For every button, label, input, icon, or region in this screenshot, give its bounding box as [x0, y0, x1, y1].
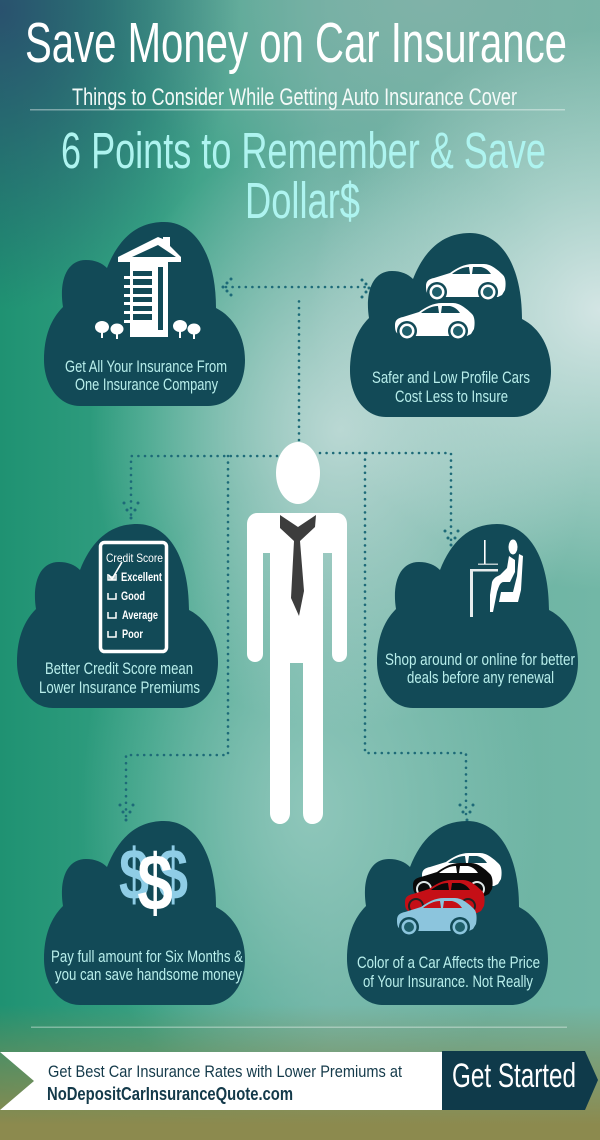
icon: credit score tablet: Poor: [122, 627, 143, 641]
panel: shop around: [377, 524, 578, 708]
call to action banner: [0, 1051, 598, 1110]
banner text: Get Best Car Insurance Rates with Lower Premiums at: [48, 1062, 402, 1081]
caption: [385, 650, 575, 687]
icon: dollar signs: $: [119, 835, 149, 915]
panel: car colour: [347, 821, 548, 1005]
caption: [51, 947, 244, 984]
caption: Color of a Car Affects the Price: [357, 953, 540, 972]
banner text: [47, 1062, 402, 1104]
panel: safer low profile cars: [350, 233, 551, 417]
caption: Better Credit Score mean: [45, 659, 193, 678]
icon: credit score tablet: [100, 542, 166, 652]
caption: Get All Your Insurance From: [65, 357, 227, 376]
icon: credit score tablet: Credit Score: [106, 551, 163, 565]
caption: [357, 953, 540, 991]
panel: one insurance company: [44, 222, 245, 406]
dotted connector lines: [118, 278, 474, 822]
icon: dollar signs: $: [158, 835, 188, 915]
caption: you can save handsome money: [55, 965, 242, 984]
icon: two white cars: [395, 264, 506, 341]
caption: Cost Less to Insure: [395, 387, 508, 406]
icon: credit score tablet: Average: [122, 608, 158, 622]
caption: [372, 368, 530, 406]
icon: person at desk: [470, 540, 523, 617]
caption: Pay full amount for Six Months &: [51, 947, 244, 966]
panel: pay six months: [44, 821, 245, 1005]
icon: dollar signs: $: [137, 838, 173, 928]
caption: Lower Insurance Premiums: [39, 678, 200, 697]
get started button: [442, 1051, 598, 1110]
banner text: NoDepositCarInsuranceQuote.com: [47, 1084, 293, 1104]
icon: house with trees: [95, 237, 200, 339]
caption: deals before any renewal: [407, 668, 554, 687]
icon: dollar signs: [119, 835, 188, 928]
heading: 6 points: Dollar$: [245, 172, 360, 229]
icon: credit score tablet: Excellent: [121, 570, 162, 584]
caption: One Insurance Company: [75, 375, 218, 394]
heading: 6 points: [61, 122, 546, 229]
panel: credit score: [17, 524, 218, 708]
caption: of Your Insurance. Not Really: [363, 972, 533, 991]
caption: [65, 357, 227, 394]
icon: credit score tablet: Good: [121, 589, 145, 603]
icon: stacked coloured cars: [397, 853, 502, 937]
central figure: man with tie: [247, 442, 347, 824]
caption: Safer and Low Profile Cars: [372, 368, 530, 387]
caption: [39, 659, 200, 697]
